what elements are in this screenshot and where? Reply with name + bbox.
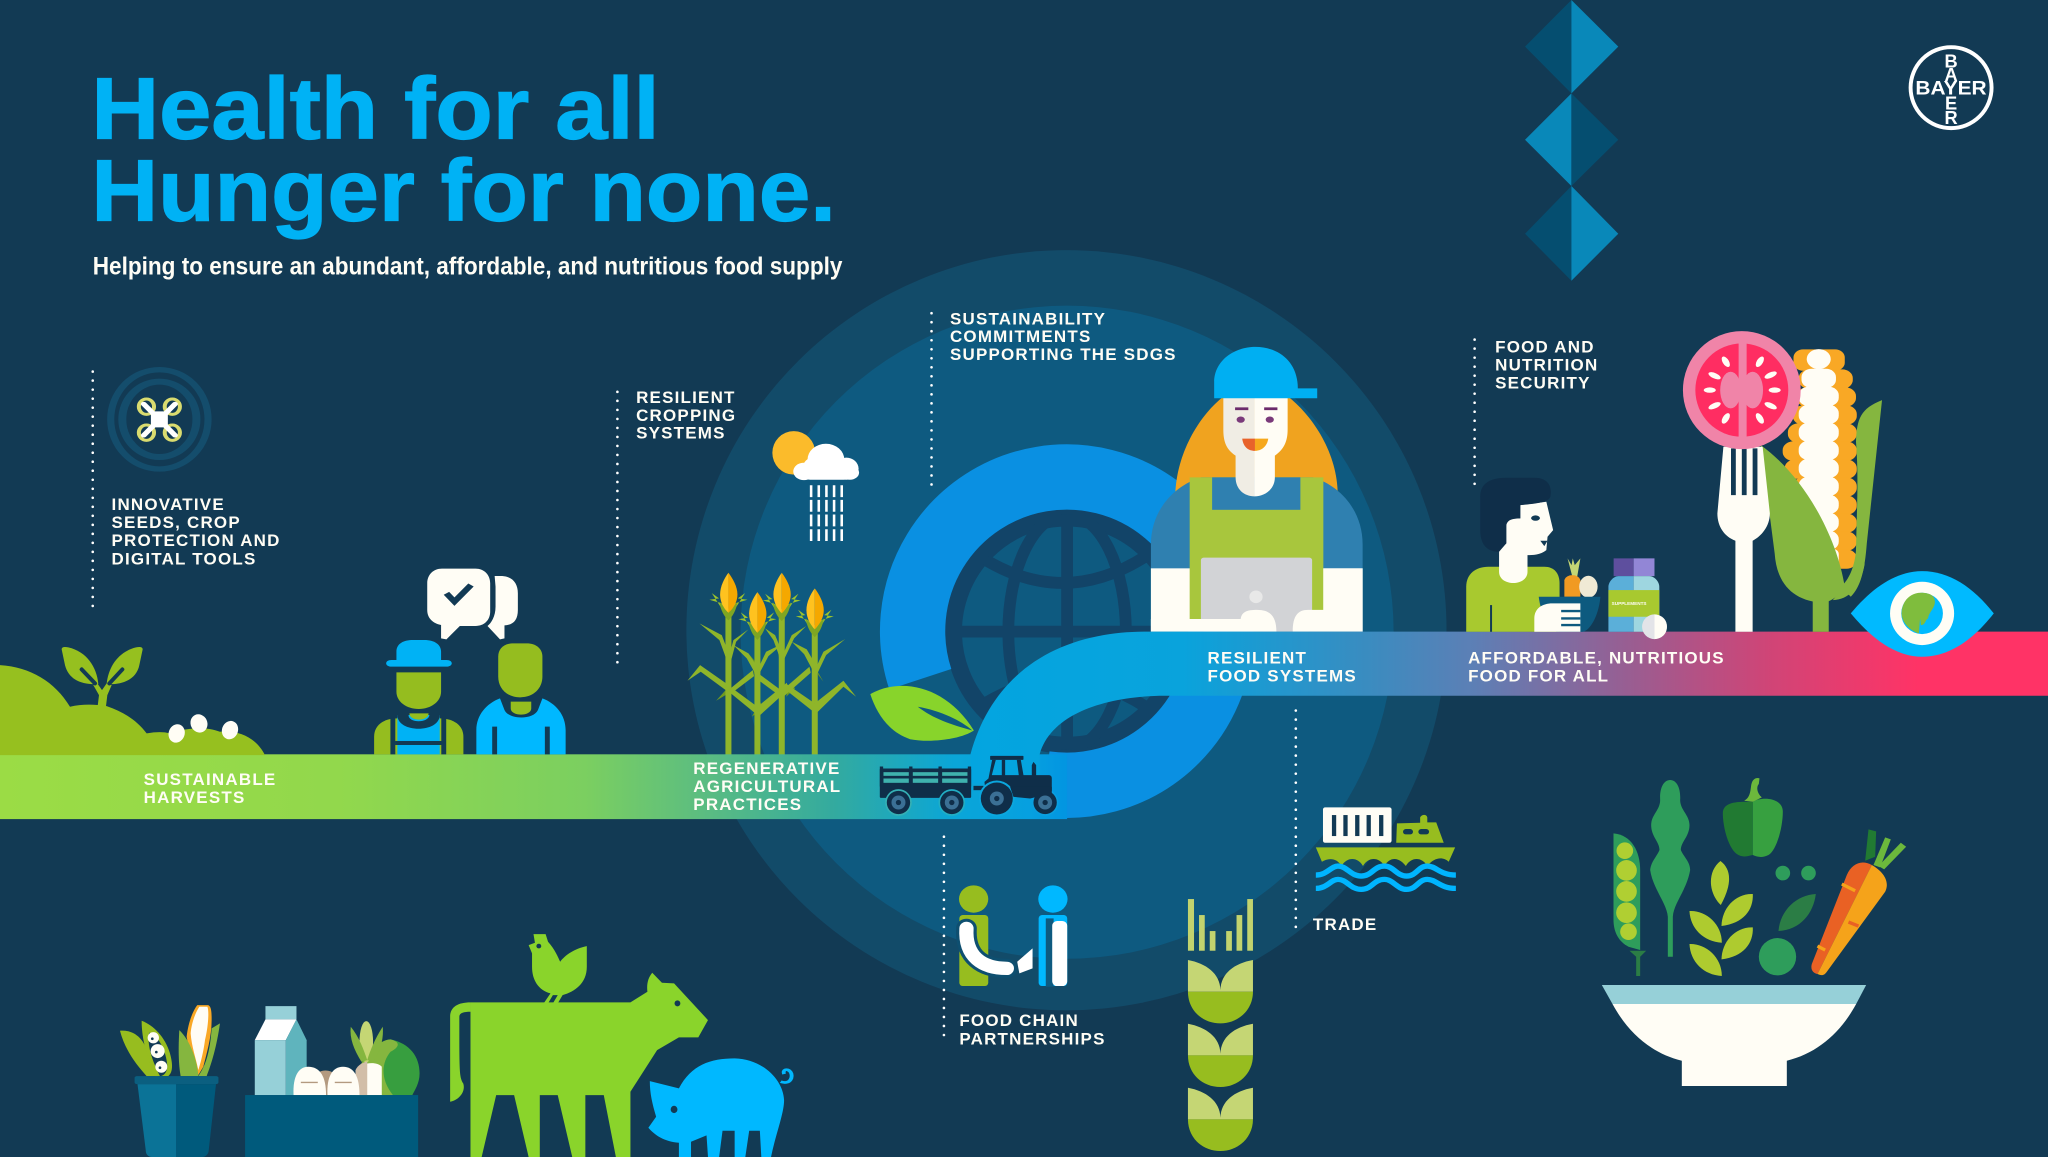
- icon: chicken: [529, 934, 587, 1003]
- label: regenerative agricultural practices: AGRICULTURAL: [693, 777, 841, 796]
- globe: [950, 513, 1185, 750]
- icon: eye with globe: [1851, 571, 1994, 657]
- diamonds decoration: [1525, 0, 1618, 281]
- dotted leader: sustainability: [931, 313, 933, 487]
- label: sustainable harvests: HARVESTS: [144, 788, 245, 807]
- label: resilient food systems: RESILIENT: [1208, 648, 1307, 667]
- label: regenerative agricultural practices: PRACTICES: [693, 795, 802, 814]
- dotted leader: resilient cropping: [616, 392, 618, 668]
- icon: person eating: [1466, 478, 1600, 632]
- label: sustainable harvests: SUSTAINABLE: [144, 770, 276, 789]
- dotted leader: partnerships: [943, 837, 945, 1042]
- label: innovative seeds: DIGITAL TOOLS: [112, 549, 256, 568]
- title: Health for all: [91, 59, 660, 157]
- title: Hunger for none.: [91, 142, 836, 240]
- label: resilient cropping systems: SYSTEMS: [636, 424, 726, 443]
- label: food and nutrition security: FOOD AND: [1495, 338, 1595, 357]
- icon: speech bubbles: [427, 569, 518, 639]
- icon: corn cob: [1761, 349, 1882, 632]
- label: sustainability commitments: SUPPORTING THE SDGS: [950, 345, 1177, 364]
- pea pod: [1613, 833, 1646, 976]
- icon: second farmer: [476, 643, 566, 754]
- label: food chain partnerships: FOOD CHAIN: [959, 1011, 1079, 1030]
- title: [91, 59, 836, 240]
- subtitle: Helping to ensure an abundant, affordable, and nutritious food supply: [93, 253, 843, 280]
- blue infinity ring: [913, 477, 1221, 785]
- icon: pot with pea pod and corn: [120, 1005, 220, 1157]
- label: food and nutrition security: [1495, 338, 1598, 393]
- icon: wheat stalk with bars: [1188, 899, 1253, 1151]
- label: innovative seeds: INNOVATIVE: [112, 495, 225, 514]
- label: resilient cropping systems: RESILIENT: [636, 388, 736, 407]
- icon: fork with tomato: [1683, 331, 1801, 632]
- icon: cow: [450, 973, 708, 1157]
- icon: leaf: [870, 686, 974, 741]
- upper gradient ribbon: [970, 632, 2048, 784]
- dotted leader: food and nutrition: [1474, 340, 1476, 487]
- leafy green: [1650, 780, 1690, 957]
- Bayer logo: E: [1945, 93, 1957, 114]
- sprig: [1689, 861, 1753, 976]
- label: affordable nutritious food: FOOD FOR ALL: [1468, 666, 1609, 685]
- peas and leaf: [1759, 866, 1816, 975]
- label: sustainability commitments: COMMITMENTS: [950, 327, 1092, 346]
- label: food chain partnerships: PARTNERSHIPS: [959, 1029, 1106, 1048]
- Bayer logo: R: [1944, 107, 1958, 128]
- icon: container ship: [1316, 807, 1456, 889]
- dotted leader: trade: [1295, 711, 1297, 928]
- label: regenerative agricultural practices: [693, 759, 841, 814]
- Bayer logo: A: [1944, 64, 1958, 85]
- label: resilient food systems: [1208, 648, 1357, 685]
- label: sustainability commitments: SUSTAINABILITY: [950, 309, 1106, 328]
- dotted leader: innovative seeds: [92, 372, 94, 607]
- label: innovative seeds: SEEDS, CROP: [112, 513, 241, 532]
- label: regenerative agricultural practices: REGENERATIVE: [693, 759, 840, 778]
- pepper: [1723, 778, 1783, 857]
- concentric background circles: [686, 250, 1447, 1010]
- Bayer logo: [1911, 47, 1992, 128]
- icon: crate with milk, eggs and vegetables: [245, 1006, 420, 1157]
- label: sustainability commitments: [950, 309, 1177, 364]
- label: sustainable harvests: [144, 770, 276, 807]
- icon: corn plants: [687, 573, 856, 757]
- label: innovative seeds: [112, 495, 281, 568]
- icon: sun, cloud and rain: [772, 431, 859, 543]
- carrot: [1811, 829, 1906, 975]
- icon: drone in rings: [111, 370, 208, 469]
- icon: supplements bottle: SUPPLEMENTS: [1612, 601, 1647, 606]
- icon: woman farmer with laptop: [1151, 347, 1363, 632]
- Bayer logo: B: [1944, 50, 1958, 71]
- label: resilient cropping systems: CROPPING: [636, 406, 736, 425]
- label: affordable nutritious food: AFFORDABLE, NUTRITIOUS: [1468, 648, 1725, 667]
- label: innovative seeds: PROTECTION AND: [112, 531, 281, 550]
- icon: hills with sprout and seeds: [0, 647, 265, 755]
- icon: farmer with hat: [374, 640, 463, 754]
- label: resilient cropping systems: [636, 388, 736, 443]
- icon: vegetables in bowl: [1602, 778, 1906, 1086]
- bowl: [1602, 985, 1866, 1086]
- lower gradient band: [0, 754, 1067, 819]
- icon: pig: [648, 1058, 792, 1157]
- icon: supplements bottle: [1608, 558, 1667, 639]
- label: food chain partnerships: [959, 1011, 1106, 1048]
- label: trade: TRADE: [1313, 915, 1377, 934]
- label: food and nutrition security: NUTRITION: [1495, 356, 1598, 375]
- icon: handshake: [959, 885, 1068, 987]
- label: affordable nutritious food: [1468, 648, 1725, 685]
- label: food and nutrition security: SECURITY: [1495, 374, 1591, 393]
- icon: tractor with trailer: [880, 756, 1058, 816]
- Bayer logo: BAYER: [1915, 78, 1987, 99]
- label: resilient food systems: FOOD SYSTEMS: [1208, 666, 1357, 685]
